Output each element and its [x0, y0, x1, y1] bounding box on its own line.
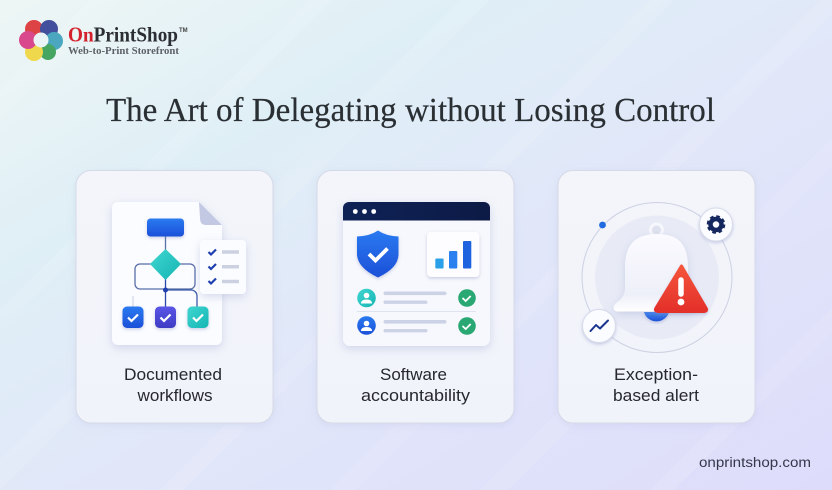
user row 1	[357, 289, 476, 307]
window dots	[353, 209, 376, 214]
card background	[317, 170, 514, 423]
bell top loop	[650, 224, 662, 236]
check box teal	[188, 306, 208, 328]
label: based alert	[613, 387, 699, 405]
flowchart diamond	[151, 250, 180, 279]
check box blue	[122, 306, 144, 328]
logo wordmark: OnPrintShop	[68, 22, 178, 46]
label: accountability	[361, 387, 471, 405]
window	[343, 202, 490, 346]
label: workflows	[136, 387, 212, 405]
gear badge	[700, 208, 732, 241]
flowchart top box	[147, 218, 184, 236]
outer ring	[582, 202, 732, 352]
bar chart card	[427, 232, 480, 277]
icon: logo flower	[19, 20, 63, 61]
inner disc	[595, 216, 719, 340]
label: Software	[380, 366, 447, 384]
flowchart junction	[163, 288, 168, 292]
card background	[76, 170, 273, 423]
title: The Art of Delegating without Losing Control	[106, 92, 715, 129]
logo tagline: Web-to-Print Storefront	[68, 46, 180, 57]
warning triangle	[655, 266, 707, 312]
label: Exception-	[614, 366, 698, 384]
trend badge	[582, 310, 616, 342]
user row 2	[357, 316, 476, 335]
logo trademark: TM	[179, 28, 188, 34]
bell clapper	[644, 312, 669, 321]
icon: workflow document	[112, 202, 246, 345]
blue dot	[599, 222, 606, 228]
checklist card	[200, 240, 246, 294]
document sheet	[112, 202, 222, 345]
window title bar	[343, 202, 490, 220]
panel: documented workflows	[76, 170, 273, 423]
icon: alert bell	[582, 202, 732, 352]
flowchart connectors	[133, 236, 197, 307]
icon: software dashboard	[343, 202, 490, 346]
bell body	[614, 234, 697, 312]
panel: software accountability	[317, 170, 514, 423]
footer url: onprintshop.com	[699, 455, 811, 470]
row divider	[357, 310, 476, 312]
shield	[357, 230, 398, 278]
card background	[558, 170, 755, 423]
document fold	[199, 202, 222, 225]
logo: OnPrintShop	[19, 20, 188, 61]
label: Documented	[124, 366, 222, 384]
check box purple	[155, 306, 176, 328]
panel: exception-based alert	[558, 170, 755, 423]
